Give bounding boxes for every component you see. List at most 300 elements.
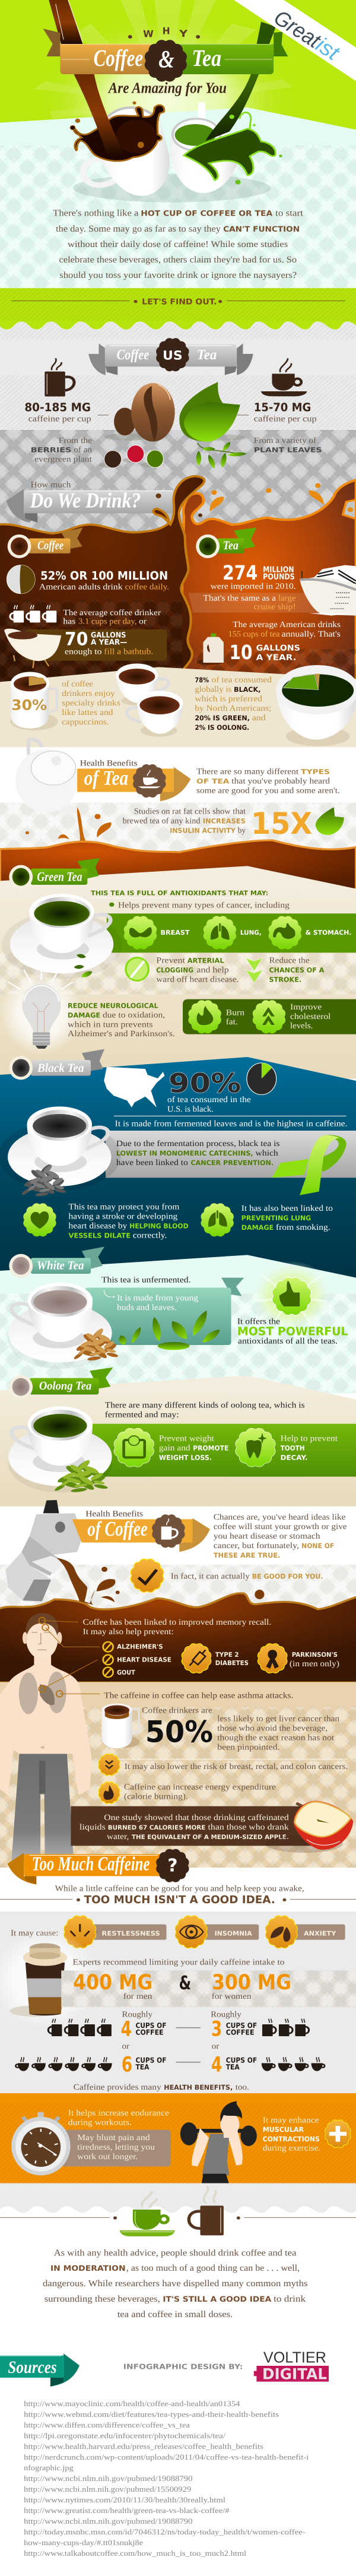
icons: women coffee cups [262,2019,309,2036]
text: consumed in US [114,1095,347,1128]
panel: green tea [0,840,356,1079]
text: type 2 diabetes: TYPE 2 [215,1651,239,1659]
box: 67 calories: than those who drank [208,1822,289,1831]
stat: tea caffeine [237,400,317,423]
text: specialty drinks: of coffee [62,679,93,688]
text: neurological damage: DAMAGE [68,1011,100,1019]
illustration: oolong leaves [53,1459,108,1493]
ribbon: do we drink [7,489,178,523]
illustration: tea splash [184,112,282,185]
comparison: women cups: CUPS OF [226,2021,257,2030]
text: oolong intro: There are many different kinds of oolong tea, which is [105,1401,305,1410]
text: types of tea: that you've probably heard [231,776,330,786]
text: muscular contractions: MUSCULAR [263,2126,304,2134]
list: source links [24,2400,309,2558]
text: neurological damage: due to oxidation, [103,1010,165,1020]
text: most powerful [237,1317,348,1346]
text: good for you: In fact, it can actually [171,1571,250,1581]
stat: tea per year: The average American drinks [233,620,341,629]
comparison: women cups [211,2010,257,2077]
label: black tea: Black Tea [37,1061,84,1075]
stat: 90 percent: 90% [169,1068,241,1099]
text: types of tea: OF TEA [196,777,230,785]
text: myths: NONE OF [301,1542,334,1550]
illustration: weightlifter [180,2101,257,2183]
text: lung damage: It has also been linked to [241,1204,333,1213]
text: arterial clogging: and help [196,966,229,974]
band: oolong benefits: PROMOTE [193,1444,228,1452]
stat: 274 million pounds: cruise ship! [253,602,296,611]
stat: liver cancer: those who avoid the beverage, [217,1723,328,1733]
text: arterial clogging: Prevent [156,956,185,965]
text: type 2 diabetes: DIABETES [215,1659,249,1667]
list: source links: http://www.ncbi.nlm.nih.gov/pubmed/19088790 [24,2474,192,2483]
label: black tea [9,1049,104,1080]
panel: sources and credits [0,2349,329,2558]
comparison: men cups: CUPS OF [135,2021,166,2030]
box: young buds: buds and leaves. [117,1303,177,1312]
comparison: men cups: 6 [122,2052,132,2077]
text: conclusion paragraph: As with any health advice, people should drink coffee and tea [54,2248,296,2258]
text: arterial clogging: ARTERIAL [187,957,224,965]
text: types of tea: There are so many different [196,767,298,776]
list: may help prevent: HEART DISEASE [117,1656,171,1663]
text: lung damage [241,1204,333,1232]
heading: antioxidants: THIS TEA IS FULL OF ANTIOXIDANTS THAT MAY: [91,889,268,897]
text: blood vessels: HELPING BLOOD [129,1222,189,1230]
text: how much: How much [31,480,71,489]
comparison: men cups: COFFEE [135,2028,164,2037]
text: it may cause: It may cause: [11,1928,58,1938]
text: lung damage: from smoking. [276,1223,330,1232]
illustration: coffee berries [98,445,164,468]
label: tea [196,527,256,558]
intro paragraph: should you toss your favorite drink or ignore the naysayers? [59,270,297,280]
illustration: tea leaves [74,953,94,979]
pill: anxiety [266,1916,345,1948]
text: parkinson's: (in men only) [290,1659,339,1668]
ribbon: of coffee [72,1514,210,1552]
stat: tea per year: 155 cups of tea [228,629,280,638]
illustration: cruise ship [300,565,356,616]
text: parkinson's [290,1651,339,1668]
stat: coffee drinkers: coffee daily. [125,583,169,591]
stat: tea caffeine: 15-70 MG [254,400,311,414]
illustration: white tea cup [8,1283,112,1369]
text: tea origin: PLANT LEAVES [254,446,322,454]
logo: Voltier Digital [254,2349,329,2383]
versus ribbon: Tea [197,347,217,362]
stat: tea per year: A YEAR. [256,653,296,662]
band: catechins: LOWEST IN MONOMERIC CATECHINS, [116,1150,253,1157]
corner ribbon: Greatist [234,0,356,81]
list: source links: http://www.ncbi.nlm.nih.gov/pubmed/15500929 [24,2485,191,2493]
illustration: coffee carafe [6,1500,83,1602]
stat: liver cancer: 50% [145,1714,213,1749]
comparison: women cups: or [212,2042,219,2050]
heading word: why: Y [179,28,188,39]
ribbon: too much caffeine: Too Much Caffeine [32,1853,150,1875]
text: insulin activity: Studies on rat fat cells show that [134,807,246,816]
list: source links: http://lpi.oregonstate.edu/infocenter/phytochemicals/tea/ [24,2432,225,2440]
list: source links: nfographic.jpg [24,2464,74,2472]
pill: insomnia: INSOMNIA [215,1929,252,1937]
illustration: stopwatch [11,2112,71,2175]
text: health benefits too: too. [236,2083,249,2091]
illustration: tea sprig [196,441,247,469]
list: may help prevent [103,1642,171,1677]
panel: caffeine workout benefits [0,2093,356,2183]
mug: 30 percent [10,672,58,730]
map: United States [104,1067,164,1107]
band: daily limits [61,1970,356,2007]
icons: women tea cups [262,2057,325,2071]
text: type 2 diabetes [215,1651,249,1667]
text: specialty drinks: specialty drinks [62,698,120,707]
versus ribbon [88,338,253,375]
pie chart: 90 percent [247,1063,276,1094]
heading word: why: W [143,29,154,39]
panel: conclusion [0,2183,356,2576]
illustration: black tea cup [0,1106,121,1191]
icon: ribbon badge [258,1644,287,1673]
stat: coffee caffeine: 80-185 MG [24,400,91,414]
text: myths: THESE ARE TRUE. [214,1552,281,1559]
comparison: men cups: Roughly [122,2010,152,2019]
icon: syringe badge [182,1644,211,1673]
text: muscular contractions: CONTRACTIONS [263,2135,320,2143]
icon: tea cup [261,358,307,396]
stat: liver cancer [142,1705,339,1752]
illustration: tea pour and drops [26,808,112,857]
band: catechins: have been linked to [116,1158,188,1167]
comparison: men cups: 4 [121,2017,132,2041]
comparison: men cups [121,2010,166,2077]
brown wave [0,1593,356,1682]
logo: Voltier Digital: DIGITAL [262,2365,327,2383]
stat: 274 million pounds: POUNDS [263,572,295,581]
band: oolong benefits: gain and [159,1444,190,1452]
label: white tea: White Tea [37,1258,84,1272]
band: daily limits: for men [123,1992,152,2001]
icon: scale [114,1428,154,1467]
credit label: INFOGRAPHIC DESIGN BY: [123,2363,243,2371]
subtitle: Are Amazing for You [107,79,227,96]
text: coffee origin [31,436,92,464]
band: catechins: CANCER PREVENTION. [190,1159,274,1167]
illustration: man [0,1613,92,1863]
panel: white tea [0,1246,356,1394]
pill: anxiety: ANXIETY [304,1929,336,1937]
stat: liver cancer: Coffee drinkers are [142,1705,212,1715]
pie chart: 52 percent [7,565,35,594]
stat: 274 million pounds: large [278,594,296,603]
icon: breast [124,916,157,950]
illustration: tea stream lower [205,74,259,141]
badge: thumbs up [251,1261,333,1332]
panel: black tea [0,1049,356,1278]
text: conclusion paragraph: IN MODERATION [50,2264,126,2273]
label: coffee: Coffee [37,539,63,552]
text: good for you: BE GOOD FOR YOU. [252,1572,323,1580]
box: 67 calories [71,1806,320,1846]
ribbon: too much caffeine [8,1849,189,1884]
liquid: tea orange [179,480,356,685]
list: source links: http://www.nytimes.com/2010/11/30/health/30really.html [24,2496,225,2504]
row: calorie burning: (calorie burning). [124,1792,188,1801]
logo: Voltier Digital: VOLTIER [263,2349,326,2366]
band: oolong benefits: Prevent weight [159,1434,214,1443]
mug: 30 percent: 30% [11,697,47,713]
illustration: shadow under cups [73,174,271,202]
illustration: apple [266,1801,353,1853]
box: young buds [85,1278,244,1350]
text: specialty drinks [62,679,120,726]
box: burn fat and cholesterol: Improve [290,1002,322,1011]
ribbon: of coffee: of Coffee [87,1517,148,1540]
box: gallons a year: A YEAR— [91,638,127,646]
text: arterial clogging: ward off heart disease. [156,974,239,984]
intro paragraph: HOT CUP OF COFFEE OR TEA [141,209,272,217]
list: source links: http://nerdcrunch.com/wp-content/uploads/2011/04/coffee-vs-tea-health-benefit-i [24,2453,309,2461]
label: green tea [9,858,100,889]
text: insulin activity: brewed tea of any kind [123,817,201,825]
illustration: mug 50 percent [101,1704,139,1748]
box: gallons a year: GALLONS [91,631,126,639]
stat: liver cancer: though the exact reason has not [217,1733,334,1742]
icon: jug [196,634,224,665]
stat: coffee drinkers: American adults drink [39,583,123,591]
panel: hero [0,0,356,297]
row: calorie burning [98,1782,276,1803]
icon: heart badge [23,1203,56,1236]
box: 67 calories: water, [107,1832,129,1841]
stat: tea caffeine: caffeine per cup [254,414,317,423]
intro paragraph: celebrate these beverages, others claim they're bad for us. So [59,254,297,264]
stat: coffee caffeine [24,400,109,423]
text: conclusion paragraph: , as too much of a good thing can be . . . well, [126,2262,300,2273]
text: coffee origin: of an [74,445,92,454]
text: too much intro: While a little caffeine can be good for you and help keep you awake, [55,1884,304,1893]
heading: health benefits: Health Benefits [85,1509,143,1518]
stat: coffee caffeine: caffeine per cup [28,414,91,423]
text: blood vessels [69,1202,189,1240]
text: insulin activity: INSULIN ACTIVITY [170,827,236,835]
decor: right splash gap [343,500,356,519]
text: most powerful: It offers the [237,1317,280,1326]
text: memory recall: Coffee has been linked to improved memory recall. [83,1618,271,1626]
panel: coffee versus tea [0,317,356,588]
text: tea origin: From a variety of [254,436,316,445]
box: burn fat and cholesterol: levels. [290,1021,313,1030]
box: blunt pain: May blunt pain and [77,2133,150,2142]
band: cancers: BREAST [161,929,190,936]
ribbon: sources [0,2353,80,2387]
text: health benefits too: Caffeine provides many [74,2083,161,2091]
illustration: white tea leaves [73,1327,119,1361]
list: source links: http://www.ncbi.nlm.nih.gov/pubmed/19088790 [24,2517,192,2526]
text: muscular contractions: It may enhance [263,2115,319,2125]
text: conclusion paragraph: tea and coffee in small doses. [117,2309,233,2319]
stat: 15X: 15X [251,806,312,841]
illustration: coffee bean [104,383,175,442]
title text: Tea [192,45,221,71]
illustration: teapot [15,739,78,814]
text: types of tea: TYPES [301,768,330,776]
box: burn fat and cholesterol [183,999,356,1034]
comparison: men cups: CUPS OF [135,2056,166,2064]
panel: health benefits of coffee [0,1500,356,1682]
list: source links: http://www.webmd.com/diet/features/tea-types-and-their-health-benefits [24,2410,279,2419]
text: blood vessels: having a stroke or developing [69,1212,177,1221]
ribbon: do we drink: Do We Drink? [30,489,141,512]
list: source links: http://today.msnbc.msn.com/id/7046312/ns/today-today_health/t/women-coffee- [24,2528,306,2536]
heading word: why [128,26,200,39]
stat: coffee drinkers [39,569,169,591]
text: specialty drinks: drinkers enjoy [62,689,115,698]
pill: restlessness [64,1916,166,1948]
icon: leaf [316,807,344,835]
list: source links: http://www.diffen.com/difference/coffee_vs_tea [24,2421,190,2429]
illustration: to-go cup [0,1930,100,2029]
band: oolong benefits: Help to prevent [281,1434,338,1443]
text: tea types share [195,675,272,732]
text: coffee origin: From the [59,436,92,445]
text: arterial clogging [156,956,239,984]
text: conclusion paragraph: surrounding these beverages, [44,2293,160,2303]
text: specialty drinks: like lattes and [62,708,113,717]
title ribbon [43,29,288,82]
stat: 274 million pounds: MILLION [263,565,294,574]
text: endurance: during workouts. [68,2118,132,2127]
pill: insomnia [175,1916,259,1948]
label: green tea: Green Tea [37,869,82,884]
illustration: young leaves [117,1309,223,1350]
box: 67 calories: liquids [80,1822,106,1831]
text: neurological damage [68,1002,175,1038]
box: gallons a year: fill a bathtub. [104,647,153,656]
text: oolong intro: fermented and may: [105,1410,179,1419]
text: blood vessels: This tea may protect you from [69,1202,179,1211]
intro paragraph: the day. Some may go as far as to say they [56,223,221,233]
box: 67 calories: One study showed that those drinking caffeinated [104,1813,289,1822]
text: consumed in US: It is made from fermented leaves and is the highest in caffeine. [115,1119,347,1128]
text: cups per day: The average coffee drinker [63,608,161,617]
text: cups per day: has [63,617,75,626]
text: stroke: CHANCES OF A [269,966,325,974]
label: oolong tea: Oolong Tea [39,1379,91,1392]
comparison: women cups: CUPS OF [226,2056,257,2064]
stat: coffee drinkers: 52% OR 100 MILLION [40,569,168,583]
intro paragraph: without their daily dose of caffeine! While some studies [68,239,288,249]
text: tea types share: 2% IS OOLONG. [195,724,249,732]
icon: stomach [269,916,301,950]
stat: liver cancer: less likely to get liver cancer than [217,1714,339,1723]
versus ribbon: US [163,348,183,363]
text: myths [214,1512,347,1559]
text: myths: coffee will stunt your growth or give [214,1522,347,1531]
intro paragraph: There's nothing like a [53,208,138,218]
text: neurological damage: REDUCE NEUROLOGICAL [68,1002,158,1009]
panel: coffee body benefits [0,1613,356,1868]
box: blunt pain: work out longer. [77,2152,138,2161]
icon: plus badge [325,2120,351,2148]
icon: brown mug [189,2186,224,2235]
text: conclusion paragraph: IT'S STILL A GOOD IDEA [163,2295,271,2303]
heading: LET'S FIND OUT. [142,298,217,306]
stat: tea per year: GALLONS [256,644,300,653]
text: blood vessels: heart disease by [69,1221,127,1230]
box: burn fat and cholesterol: fat. [226,1017,238,1026]
corner ribbon: Greatist: Great [270,5,326,53]
illustration: tea stream top [256,22,276,45]
text: conclusion paragraph [43,2248,307,2319]
stat: tea per year: 10 [229,641,253,664]
band: daily limits: for women [212,1992,252,2001]
band: cancers: LUNG, [240,929,262,936]
text: memory recall: It may also help prevent: [83,1627,174,1636]
text: too much intro [0,1884,356,1906]
icon: bathtub [4,629,61,668]
box: gallons a year [25,628,167,661]
row: calorie burning: Caffeine can increase energy expenditure [124,1783,276,1792]
text: cups per day: 3.1 cups per day, [78,617,136,626]
text: cancer prevention: Helps prevent many types of cancer, including [118,900,290,910]
panel: health benefits of tea [0,739,356,860]
panel: how much do we drink [0,476,356,685]
stat: tea per year: annually. That's [281,629,341,638]
text: muscular contractions: during exercise. [263,2144,320,2153]
panel: side effects and limits [0,1916,356,2091]
panel: let's find out band [0,288,356,330]
icon: light bulb [0,964,82,1055]
icon: coffee mug [44,358,74,397]
text: tea types share: by North Americans; [195,704,271,713]
comparison: women cups: COFFEE [226,2028,255,2037]
text: too much intro: TOO MUCH ISN'T A GOOD IDEA. [84,1893,275,1906]
box: 67 calories: THE EQUIVALENT OF A MEDIUM-SIZED APPLE. [132,1834,289,1841]
versus ribbon: Coffee [117,347,149,362]
comparison: men cups: TEA [135,2063,149,2071]
text: myths: Chances are, you've heard ideas like [214,1512,345,1521]
illustration: coffee stream [49,0,83,45]
icon: tooth [236,1428,275,1467]
panel: too much caffeine [0,1849,356,2113]
text: myths: you heart disease or stomach [214,1531,320,1540]
comparison: women cups: 3 [211,2017,222,2041]
diagram: callout lines [39,1618,100,1697]
text: types of tea [196,767,340,795]
text: cups per day: or [139,617,147,626]
text: blood vessels: VESSELS DILATE [69,1232,131,1240]
text: oolong intro [105,1401,305,1419]
stat: 274 million pounds: 274 [223,561,258,584]
text: tea types share: BLACK, [234,686,260,694]
band: oolong benefits: WEIGHT LOSS. [159,1454,212,1462]
text: types of tea: some are good for you and some aren't. [196,786,340,795]
stat: tea per year [228,620,341,664]
box: blunt pain [61,2130,171,2166]
icon: lung badge [201,1203,234,1236]
text: most powerful: antioxidants of all the teas. [238,1336,338,1346]
text: arterial clogging: CLOGGING [156,966,193,974]
title text [94,45,221,73]
pill: restlessness: RESTLESSNESS [101,1929,160,1937]
label: white tea [9,1246,104,1278]
decor lines [176,2028,201,2062]
band: cancers [107,913,356,952]
comparison: women cups: 4 [211,2052,222,2077]
